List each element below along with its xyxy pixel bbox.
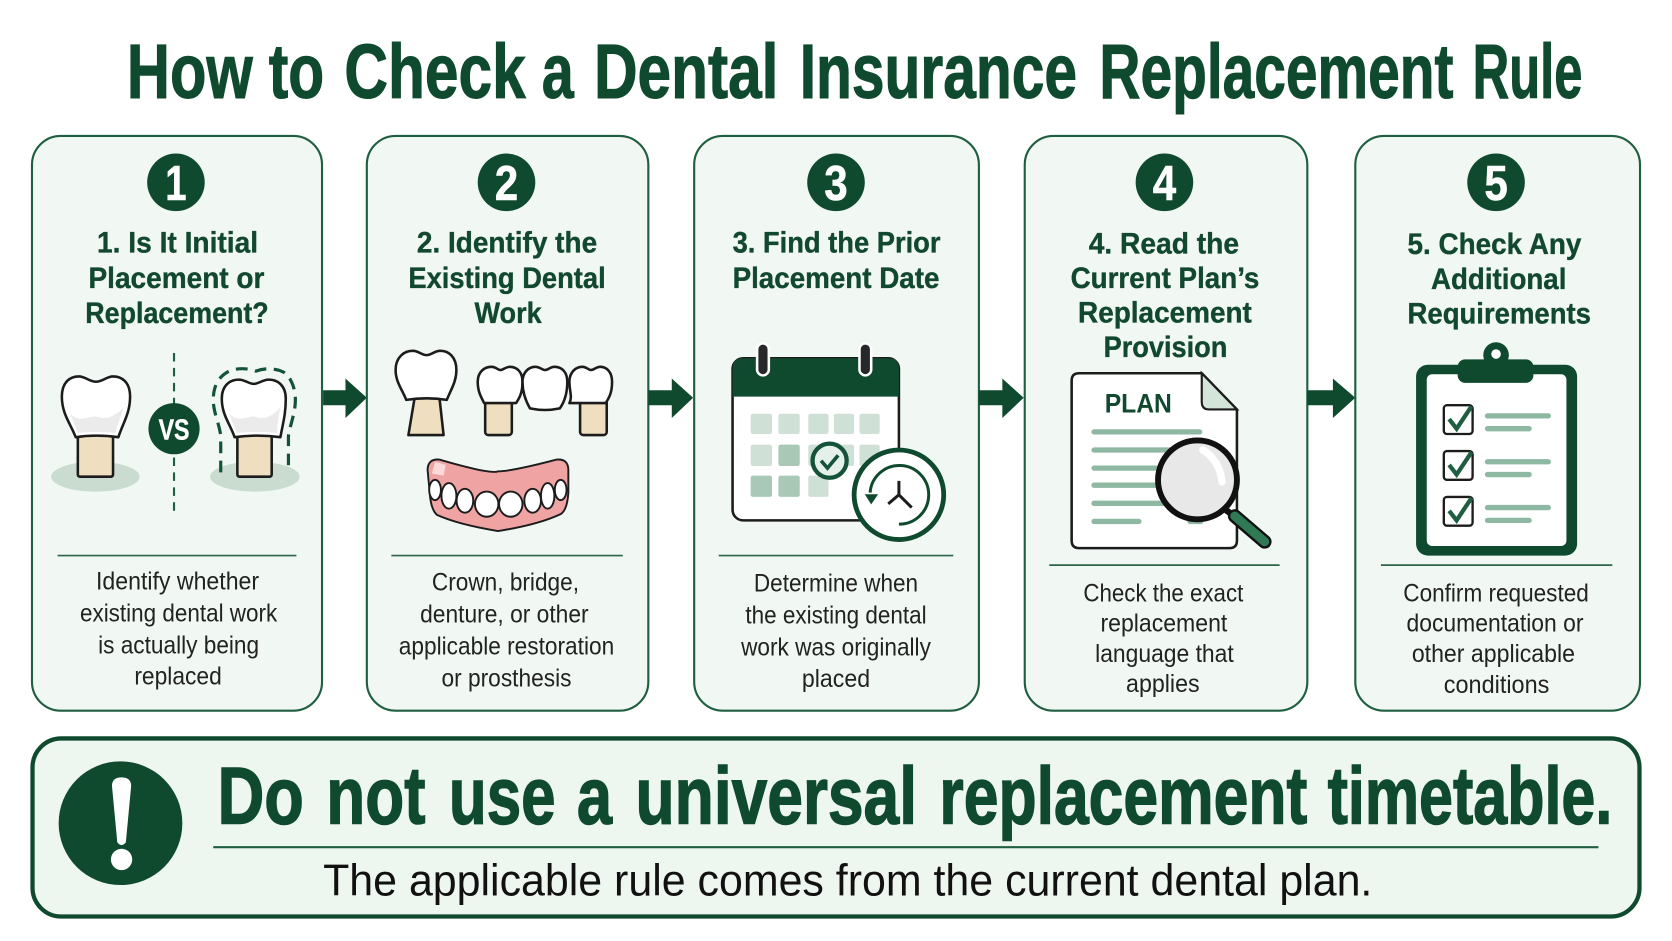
step 5 number badge: 5 [1484,157,1508,211]
step 3 description [740,570,932,693]
step 4 heading: Provision [1104,331,1227,364]
step 3 description: work was originally [740,634,932,661]
step 3 number badge: 3 [824,157,848,211]
step 3 number badge [807,154,865,211]
step 1 heading: 1. Is It Initial [97,227,258,260]
title: Replacement [1099,30,1453,115]
step 3 heading: 3. Find the Prior [733,227,941,260]
step 2 heading: 2. Identify the [417,227,597,260]
banner headline: a [577,752,613,842]
step 4 heading: 4. Read the [1089,227,1239,260]
step 1 number badge: 1 [165,157,187,211]
arrow 2 to 3 [648,379,693,418]
step 2 description: Crown, bridge, [432,570,579,597]
step 5 number badge [1467,154,1525,211]
step 2 description: denture, or other [420,602,589,629]
step 5 description [1403,580,1589,699]
step 4 number badge [1136,154,1193,211]
step 3 description: the existing dental [745,602,927,629]
step 2 description: applicable restoration [399,634,614,661]
step 5 heading: Requirements [1408,298,1591,331]
step 1 description: Identify whether [96,569,259,596]
step 2 description [399,570,614,693]
arrow 3 to 4 [979,379,1024,418]
step 4 number badge: 4 [1153,157,1177,211]
step 4 description: Check the exact [1083,580,1243,607]
step 2 heading: Work [475,297,542,330]
step 5 heading: 5. Check Any [1408,228,1582,261]
step 1 number badge [147,154,205,211]
step 1 description: existing dental work [80,601,278,628]
step 5 description: Confirm requested [1403,580,1589,607]
step 5 description: other applicable [1412,641,1575,668]
step 4 description: language that [1095,641,1234,668]
step 2 number badge [478,154,535,211]
banner subtext: The applicable rule comes from the current dental plan. [323,856,1372,906]
step 3 heading [733,227,941,295]
step 4 heading: Replacement [1078,297,1252,330]
step 3 heading: Placement Date [733,262,939,295]
step 2 heading: Existing Dental [408,262,606,295]
step 1 heading: Placement or [89,262,265,295]
title: Dental [594,30,778,115]
step 4 heading [1071,227,1259,364]
banner headline [218,752,1612,842]
banner headline: use [449,752,556,842]
panel: step 4 plan replacement provision [1025,136,1307,711]
step 1 heading [85,227,269,330]
panel: step 1 initial or replacement [32,136,322,711]
step 1 description: replaced [134,664,222,691]
step 3 description: placed [802,666,870,693]
panel: step 5 additional requirements [1355,136,1640,711]
step 2 heading [408,227,606,330]
step 1 description [80,569,278,691]
icon: plan document with magnifier: PLAN [1105,389,1172,419]
title: Rule [1473,30,1582,115]
step 4 description [1083,580,1243,698]
icon: dental bridge [478,367,612,435]
title: Insurance [800,30,1077,115]
title: Check [344,30,526,115]
panel: step 2 existing dental work [367,136,648,711]
title: a [542,30,575,115]
step 2 number badge: 2 [495,157,518,211]
step 2 description: or prosthesis [441,666,572,693]
panel: step 3 prior placement date [694,136,979,711]
icon: clipboard checklist [1416,342,1577,556]
arrow 4 to 5 [1307,379,1355,418]
step 3 description: Determine when [754,570,918,597]
title: How [127,30,253,115]
icon: tooth versus replacement tooth [51,353,300,516]
banner headline: universal [636,752,917,842]
title [127,30,1582,115]
banner headline: not [326,752,425,842]
step 4 description: applies [1126,671,1200,698]
icon: exclamation mark [59,761,182,885]
step 4 heading: Current Plan’s [1071,262,1259,295]
icon: calendar with clock [733,343,944,540]
icon: denture [428,460,568,531]
banner headline: replacement [939,752,1307,842]
icon: plan document with magnifier [1072,373,1265,548]
callout: warning banner [33,738,1639,917]
step 5 heading [1408,228,1591,331]
icon: crown on tooth [396,351,456,435]
step 5 heading: Additional [1431,263,1566,296]
step 5 description: conditions [1444,672,1549,699]
arrow 1 to 2 [323,379,367,418]
step 1 heading: Replacement? [85,297,269,330]
step 1 description: is actually being [98,633,259,660]
step 5 description: documentation or [1406,610,1583,637]
icon: tooth versus replacement tooth: VS [159,414,189,446]
title: to [269,30,324,115]
step 4 description: replacement [1100,610,1228,637]
banner headline: Do [218,752,304,842]
